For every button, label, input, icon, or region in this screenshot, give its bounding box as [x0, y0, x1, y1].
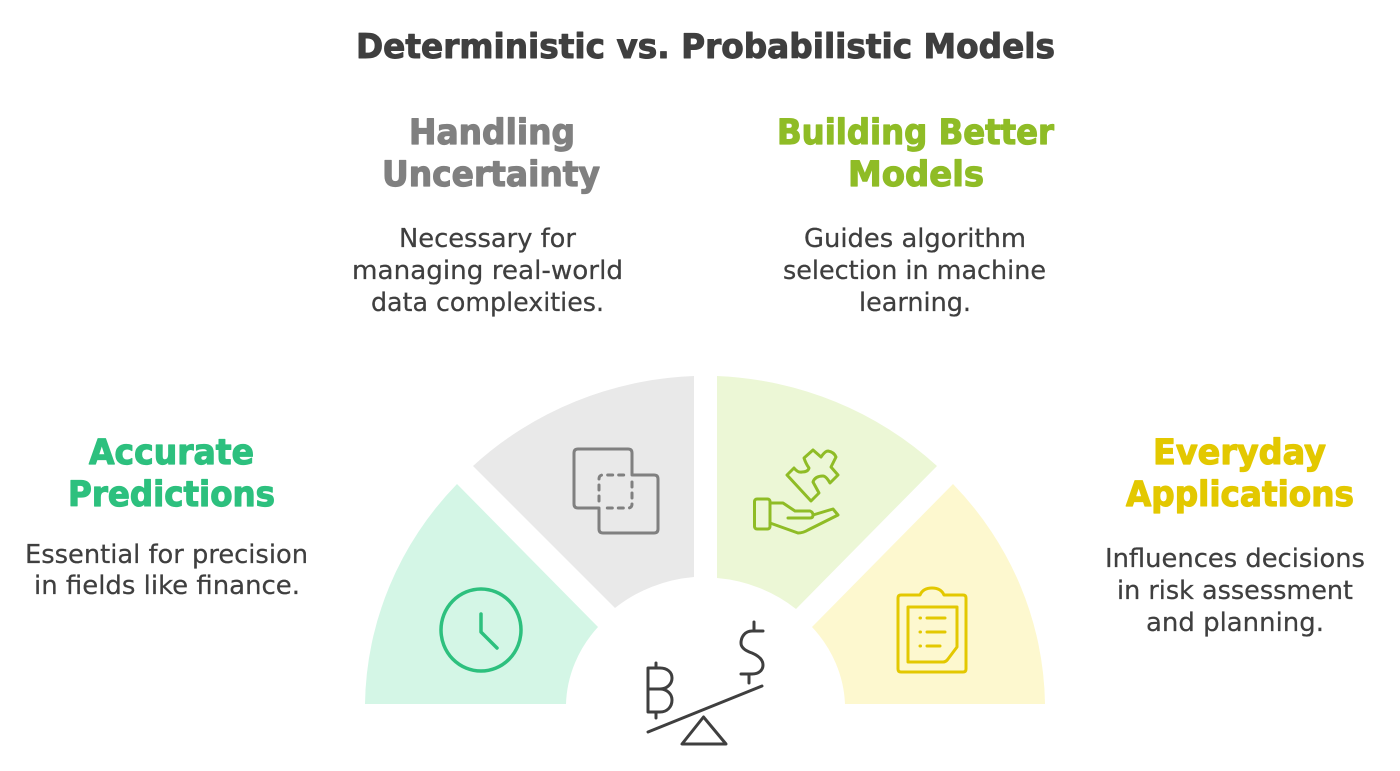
segment: accurate predictions — [365, 484, 598, 704]
segment: everyday applications — [812, 484, 1045, 704]
seesaw fulcrum — [682, 717, 726, 744]
description: handling uncertainty: Necessary for — [399, 224, 576, 254]
seesaw beam — [648, 686, 762, 732]
dollar symbol — [741, 622, 763, 683]
description: everyday applications: and planning. — [1146, 608, 1324, 638]
segment: building better models — [717, 376, 937, 609]
heading: accurate predictions — [68, 433, 275, 515]
heading: accurate predictions: Accurate — [89, 433, 254, 473]
heading: everyday applications: Everyday — [1153, 433, 1326, 473]
description: building better models: Guides algorithm — [804, 224, 1026, 254]
description: everyday applications: in risk assessment — [1117, 576, 1353, 606]
heading: handling uncertainty: Uncertainty — [382, 155, 600, 195]
heading: building better models — [777, 113, 1055, 195]
description: everyday applications: Influences decisions — [1105, 544, 1365, 574]
heading: building better models: Models — [848, 155, 984, 195]
heading: everyday applications — [1126, 433, 1354, 515]
panel: accurate predictions text — [25, 433, 308, 601]
description: building better models: selection in machine — [783, 256, 1046, 286]
heading: accurate predictions: Predictions — [68, 475, 275, 515]
description: accurate predictions: in fields like finance. — [34, 571, 300, 601]
icon: clock — [441, 589, 521, 671]
bitcoin symbol — [648, 663, 672, 718]
panel: handling uncertainty text — [352, 113, 623, 318]
description: accurate predictions — [25, 540, 308, 601]
description: handling uncertainty: managing real-world — [352, 256, 623, 286]
heading: handling uncertainty: Handling — [409, 113, 575, 153]
icon: balance with bitcoin and dollar — [648, 622, 763, 744]
panel: building better models text — [777, 113, 1055, 318]
panel: everyday applications text — [1105, 433, 1365, 638]
title: Deterministic vs. Probabilistic Models — [356, 27, 1055, 67]
icon: hand holding puzzle piece — [754, 450, 838, 533]
heading: everyday applications: Applications — [1126, 475, 1354, 515]
description: accurate predictions: Essential for precision — [25, 540, 308, 570]
heading: handling uncertainty — [382, 113, 600, 195]
description: handling uncertainty — [352, 224, 623, 318]
segment: handling uncertainty — [473, 376, 694, 608]
icon: overlapping squares — [574, 449, 658, 533]
description: everyday applications — [1105, 544, 1365, 638]
description: building better models: learning. — [859, 288, 971, 318]
icon: clipboard — [898, 588, 966, 672]
description: handling uncertainty: data complexities. — [371, 288, 604, 318]
description: building better models — [783, 224, 1046, 318]
heading: building better models: Building Better — [777, 113, 1055, 153]
